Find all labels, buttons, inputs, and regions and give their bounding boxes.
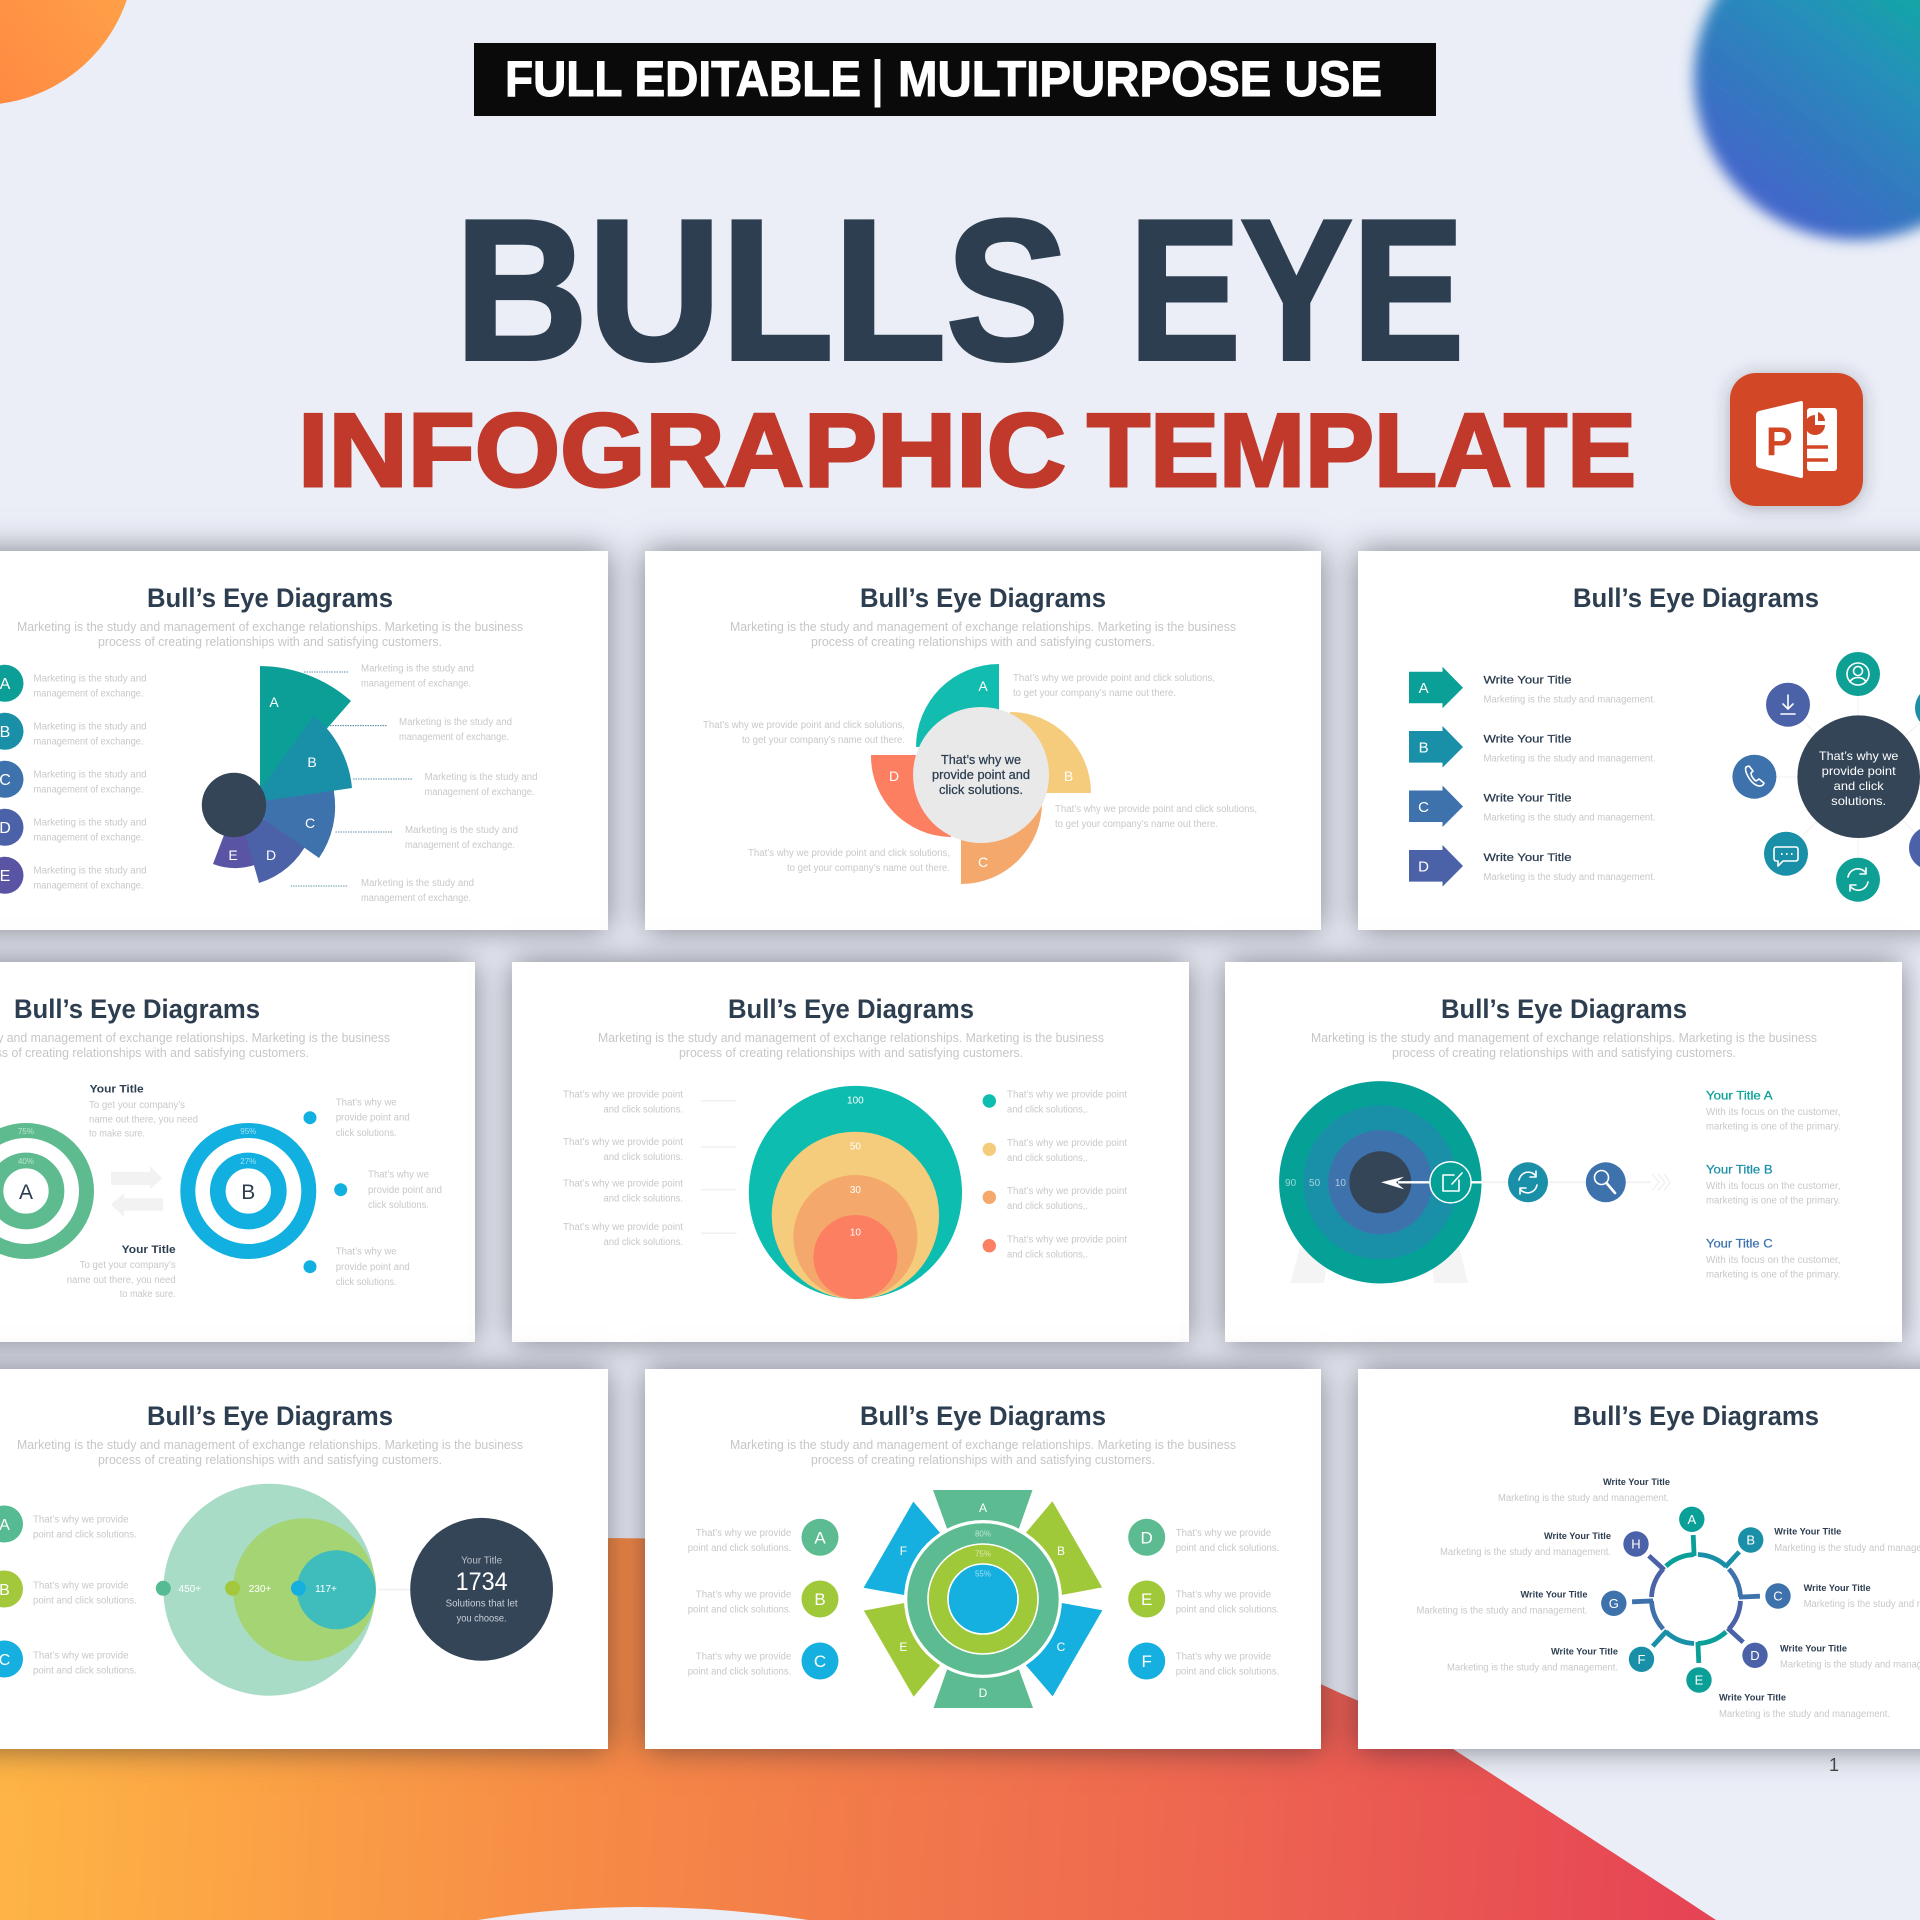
slide heading: Bull’s Eye Diagrams [1573,583,1819,613]
right bullet list: That’s why we [336,1247,397,1258]
left legend: Marketing is the study and [34,770,146,781]
slide heading: Bull’s Eye Diagrams [860,583,1106,613]
pinwheel chart: B [1064,768,1073,784]
pinwheel captions: That’s why we provide point and click solutions, [748,848,950,859]
target A: 75% [18,1127,34,1136]
right legend: That’s why we provide point [1007,1234,1127,1245]
title list: With its focus on the customer, [1706,1181,1840,1192]
left legend: point and click solutions. [688,1605,791,1616]
right legend: point and click solutions. [1176,1543,1279,1554]
hexagon chart: A [979,1501,987,1515]
left legend: That’s why we provide [696,1652,792,1663]
pinwheel chart: click solutions. [939,783,1023,797]
right legend: F [1142,1652,1152,1671]
right legend [983,1090,1127,1260]
ring labels: Write Your Title [1804,1583,1871,1594]
target A: A [19,1181,33,1204]
top title block: Your Title [90,1084,144,1096]
ring nodes [1601,1507,1791,1693]
page number: 1 [1829,1755,1839,1775]
right callouts: Marketing is the study and [399,717,512,728]
ring nodes: E [1695,1673,1704,1688]
fan chart: E [228,847,238,863]
slide heading: Bull’s Eye Diagrams [147,583,393,613]
ring chart [1629,1532,1763,1666]
ring labels: Marketing is the study and management. [1440,1547,1611,1558]
target with arrow: 50 [1309,1178,1321,1189]
left legend: management of exchange. [34,785,144,796]
left legend [0,1506,137,1678]
slide subtitle: Marketing is the study and management of exchange relationships. Marketing is the business [730,619,1236,634]
slide subtitle [17,1437,523,1467]
hexagon chart: C [1057,1640,1066,1654]
pinwheel captions: That’s why we provide point and click solutions, [1013,673,1215,684]
right legend: That’s why we provide [1176,1528,1272,1539]
icon: powerpoint [1730,373,1863,506]
panel: twin target slide [0,962,475,1342]
panel: arrows and hub slide [1358,551,1920,930]
arrow list: Marketing is the study and management. [1484,753,1656,764]
bottom light bump [478,1907,808,1920]
ring nodes: F [1638,1652,1646,1667]
bottom title block: Your Title [122,1244,176,1256]
pinwheel chart: A [978,678,988,694]
hexagon chart: E [899,1640,907,1654]
panel: nested circles slide [512,962,1189,1342]
hexagon chart: D [979,1686,988,1700]
subtitle [298,393,1636,509]
pinwheel captions [703,673,1257,874]
right legend: and click solutions,. [1007,1201,1088,1212]
slide subtitle: process of creating relationships with and satisfying customers. [1392,1045,1736,1060]
main title [455,179,1464,402]
subtitle: TEMPLATE [1087,393,1636,509]
right bullet list: provide point and [336,1113,410,1124]
pinwheel chart: That’s why we [941,753,1021,767]
left captions: and click solutions. [604,1152,683,1163]
left legend: point and click solutions. [688,1666,791,1677]
slide subtitle [17,619,523,649]
left legend: That’s why we provide [33,1515,129,1526]
slide heading: Bull’s Eye Diagrams [860,1401,1106,1431]
orange corner circle [0,0,135,105]
hub and icons [1732,652,1920,902]
right callouts: management of exchange. [399,732,509,743]
arrow list: A [1419,680,1429,697]
left legend: point and click solutions. [33,1595,137,1606]
title list: marketing is one of the primary. [1706,1196,1840,1207]
top title block [89,1084,198,1140]
hub and icons: and click [1834,779,1885,793]
target with arrow: 10 [1335,1178,1346,1189]
left legend [688,1519,838,1680]
right bullet list [304,1098,442,1288]
arrow list: Write Your Title [1484,793,1572,805]
nested venn chart [156,1484,410,1696]
left legend: That’s why we provide [33,1650,129,1661]
bottom title block: to make sure. [120,1289,176,1300]
fan chart: D [266,847,276,863]
target B: 27% [240,1157,256,1166]
pinwheel captions: to get your company’s name out there. [1055,819,1218,830]
right bullet list: That’s why we [336,1098,397,1109]
nested venn chart: 117+ [315,1584,337,1595]
pinwheel captions: That’s why we provide point and click solutions, [1055,804,1257,815]
left captions: That’s why we provide point [563,1137,683,1148]
left captions: That’s why we provide point [563,1179,683,1190]
ring labels: Write Your Title [1544,1531,1611,1542]
slide heading: Bull’s Eye Diagrams [1441,994,1687,1024]
orange to red wave [0,1538,1716,1920]
slide subtitle [730,619,1236,649]
bottom title block: name out there, you need [67,1275,176,1286]
left legend: Marketing is the study and [34,722,146,733]
main title: BULLS [455,179,1069,402]
ring nodes: H [1631,1537,1641,1552]
nested circles chart: 10 [850,1228,861,1238]
right legend: and click solutions,. [1007,1105,1088,1116]
slide subtitle: process of creating relationships with and satisfying customers. [811,634,1155,649]
left legend: That’s why we provide [696,1590,792,1601]
left captions: and click solutions. [604,1237,683,1248]
slide subtitle: process of creating relationships with and satisfying customers. [679,1045,1023,1060]
ring labels: Marketing is the study and management. [1416,1606,1588,1617]
slide subtitle [730,1437,1236,1467]
ring nodes: A [1687,1512,1696,1527]
arrow list: B [1419,740,1429,756]
target A: 40% [18,1157,34,1166]
ring labels: Marketing is the study and management. [1498,1493,1669,1504]
left legend: B [814,1590,826,1609]
right callouts [291,664,538,904]
slide subtitle: Marketing is the study and management of exchange relationships. Marketing is the business [730,1437,1236,1452]
right callouts: management of exchange. [405,840,515,851]
left captions [563,1090,737,1248]
ring labels: Marketing is the study and management. [1447,1662,1618,1673]
hexagon chart: F [900,1544,907,1558]
right legend: point and click solutions. [1176,1666,1279,1677]
ring labels: Marketing is the study and management. [1719,1709,1890,1720]
left legend: point and click solutions. [33,1665,137,1676]
main title: EYE [1129,179,1464,402]
icon: powerpoint: P [1766,420,1793,464]
slide subtitle: process of creating relationships with and satisfying customers. [98,1452,442,1467]
right callouts: Marketing is the study and [424,772,538,783]
right legend: That’s why we provide [1176,1590,1272,1601]
ring labels [1416,1477,1920,1720]
nested venn chart: 230+ [249,1584,271,1595]
nested circles chart: 50 [850,1142,861,1152]
left legend: Marketing is the study and [34,674,146,685]
title list: marketing is one of the primary. [1706,1122,1840,1133]
stat circle: Your Title [461,1556,503,1566]
panel: fan bulls eye slide [0,551,608,930]
panel: hexagon target slide [645,1369,1321,1749]
right legend: and click solutions,. [1007,1249,1088,1260]
right legend: That’s why we provide [1176,1652,1272,1663]
target with arrow [1279,1081,1670,1284]
top title block: To get your company’s [89,1100,185,1111]
left legend: Marketing is the study and [34,818,146,829]
title list: Your Title C [1706,1237,1773,1251]
ring labels: Write Your Title [1520,1590,1588,1601]
banner: FULL EDITABLE [505,51,861,107]
slide subtitle [0,1030,390,1060]
title list [1706,1089,1840,1281]
slide subtitle: Marketing is the study and management of exchange relationships. Marketing is the business [1311,1030,1817,1045]
right legend: E [1141,1590,1152,1609]
right legend: That’s why we provide point [1007,1138,1127,1149]
slide subtitle: Marketing is the study and management of exchange relationships. Marketing is the business [17,1437,523,1452]
arrow list: Write Your Title [1484,852,1572,864]
left legend: That’s why we provide [696,1528,792,1539]
right legend: That’s why we provide point [1007,1186,1127,1197]
slide subtitle: process of creating relationships with and satisfying customers. [98,634,442,649]
left legend: management of exchange. [34,833,144,844]
bottom title block: To get your company’s [80,1260,176,1271]
exchange arrows [111,1166,163,1217]
pinwheel captions: to get your company’s name out there. [742,735,905,746]
left legend: C [814,1652,826,1671]
nested circles chart [749,1086,962,1299]
left legend: management of exchange. [34,737,144,748]
arrow list: Marketing is the study and management. [1484,813,1656,824]
hexagon chart [864,1490,1102,1708]
right callouts: management of exchange. [361,679,471,690]
arrow list: Write Your Title [1484,674,1572,686]
title list: marketing is one of the primary. [1706,1270,1840,1281]
right bullet list: click solutions. [336,1277,397,1288]
fan chart: A [269,694,279,710]
ring labels: Write Your Title [1603,1477,1670,1488]
right bullet list: provide point and [368,1185,442,1196]
slide heading: Bull’s Eye Diagrams [1573,1401,1819,1431]
left legend: management of exchange. [34,881,144,892]
banner: MULTIPURPOSE USE [898,51,1382,107]
title list: Your Title B [1706,1163,1773,1177]
hexagon chart: 55% [975,1570,991,1578]
hexagon chart: B [1057,1544,1065,1558]
right bullet list: click solutions. [336,1128,397,1139]
fan chart: B [307,754,317,770]
target B: B [241,1181,255,1204]
pinwheel captions: to get your company’s name out there. [1013,688,1176,699]
left legend: That’s why we provide [33,1580,129,1591]
right legend: D [1141,1528,1153,1548]
stat circle: you choose. [457,1614,507,1625]
ring nodes: D [1750,1648,1760,1663]
left captions: That’s why we provide point [563,1222,683,1233]
right callouts: Marketing is the study and [405,825,518,836]
banner: | [872,51,883,108]
panel: venn target slide [0,1369,608,1749]
top title block: name out there, you need [89,1115,198,1126]
right legend: That’s why we provide point [1007,1090,1127,1101]
left captions: That’s why we provide point [563,1090,683,1101]
bottom title block [67,1244,176,1300]
ring labels: Write Your Title [1780,1643,1847,1654]
panel: archery target slide [1225,962,1902,1342]
pinwheel chart [871,664,1091,884]
right callouts: management of exchange. [361,893,471,904]
slide heading: Bull’s Eye Diagrams [728,994,974,1024]
blue gradient circle [1694,0,1920,240]
left legend: management of exchange. [34,689,144,700]
nested circles chart: 100 [847,1096,864,1106]
arrow list [1409,667,1656,887]
slide subtitle: process of creating relationships with and satisfying customers. [811,1452,1155,1467]
arrow list: Marketing is the study and management. [1484,872,1656,883]
pinwheel captions: That’s why we provide point and click solutions, [703,720,905,731]
slide subtitle [1311,1030,1817,1060]
target with arrow: 90 [1285,1178,1297,1189]
ring nodes: G [1609,1596,1619,1611]
right bullet list: click solutions. [368,1200,429,1211]
panel: ring and spokes slide [1358,1369,1920,1749]
hexagon chart: 75% [975,1550,991,1558]
pinwheel chart: C [978,854,988,870]
hub and icons: That’s why we [1819,749,1899,763]
title list: With its focus on the customer, [1706,1255,1840,1266]
banner [474,43,1436,116]
left legend [0,665,146,894]
left legend: Marketing is the study and [34,866,146,877]
fan chart [202,666,352,883]
arrow list: Marketing is the study and management. [1484,694,1656,705]
slide subtitle: Marketing is the study and management of exchange relationships. Marketing is the business [598,1030,1104,1045]
target B [188,1127,309,1252]
slide subtitle: Marketing is the study and management of exchange relationships. Marketing is the business [17,619,523,634]
right callouts: Marketing is the study and [361,664,474,675]
top title block: to make sure. [89,1129,145,1140]
slide heading: Bull’s Eye Diagrams [14,994,260,1024]
right legend: and click solutions,. [1007,1153,1088,1164]
hexagon chart: 80% [975,1530,991,1538]
subtitle: INFOGRAPHIC [298,393,1066,509]
ring labels: Write Your Title [1774,1527,1841,1538]
left legend: point and click solutions. [688,1543,791,1554]
nested venn chart: 450+ [179,1584,201,1595]
right bullet list: That’s why we [368,1170,429,1181]
arrow list: C [1418,799,1429,816]
right callouts: management of exchange. [424,787,534,798]
right legend [1128,1519,1279,1680]
pinwheel chart: D [889,768,899,784]
slide heading: Bull’s Eye Diagrams [147,1401,393,1431]
stat circle: 1734 [456,1568,508,1596]
right legend: point and click solutions. [1176,1605,1279,1616]
target A [0,1127,86,1252]
ring nodes: B [1746,1533,1755,1548]
hub and icons: provide point [1822,764,1896,778]
left legend: point and click solutions. [33,1530,137,1541]
ring nodes: C [1773,1589,1783,1604]
left legend: A [814,1528,826,1548]
left captions: and click solutions. [604,1105,683,1116]
slide subtitle [598,1030,1104,1060]
left captions: and click solutions. [604,1194,683,1205]
pinwheel captions: to get your company’s name out there. [787,863,950,874]
pinwheel chart: provide point and [932,768,1030,782]
fan chart: C [305,815,315,831]
process icons [1508,1162,1626,1202]
stat circle [410,1518,553,1661]
ring labels: Write Your Title [1551,1646,1618,1657]
nested circles chart: 30 [850,1185,861,1196]
hub and icons: solutions. [1831,794,1886,808]
panel: pinwheel slide [645,551,1321,930]
arrow list: D [1418,858,1429,876]
arrow list: Write Your Title [1484,733,1572,745]
ring labels: Write Your Title [1719,1693,1786,1704]
title list: With its focus on the customer, [1706,1107,1840,1118]
stat circle: Solutions that let [446,1599,518,1610]
right callouts: Marketing is the study and [361,878,474,889]
right bullet list: provide point and [336,1262,410,1273]
title list: Your Title A [1706,1089,1773,1103]
target B: 95% [240,1127,256,1136]
